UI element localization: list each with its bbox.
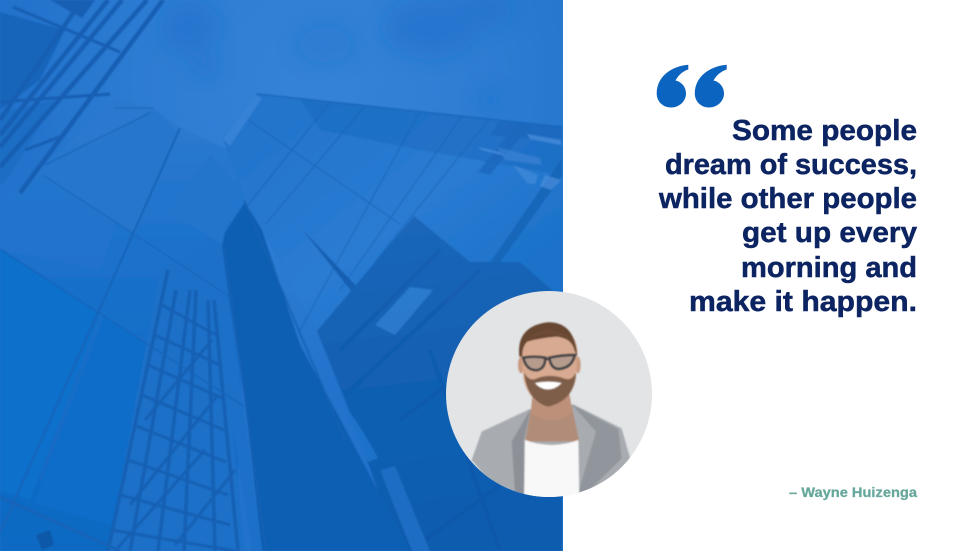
spike xyxy=(305,232,356,290)
quote text: make it happen. xyxy=(689,286,917,318)
ears xyxy=(518,357,524,373)
bottom left fixture xyxy=(36,530,54,550)
quote text: dream of success, xyxy=(665,149,917,181)
portrait photo xyxy=(446,291,652,502)
clouds xyxy=(162,0,510,112)
photo background circle xyxy=(446,291,652,497)
chest xyxy=(525,405,579,442)
smile xyxy=(535,382,562,389)
neck xyxy=(531,393,573,420)
quote text: while other people xyxy=(658,183,917,215)
light column xyxy=(345,405,378,462)
upper edge of building xyxy=(256,94,562,127)
lattice tower xyxy=(110,344,244,551)
icon: opening quotation mark xyxy=(657,65,727,108)
glass building, upper right xyxy=(223,95,562,335)
quote text: get up every xyxy=(742,217,917,249)
quote text xyxy=(658,115,917,318)
head xyxy=(522,336,578,397)
beard xyxy=(524,372,576,407)
hair xyxy=(519,322,577,357)
quote text: Some people xyxy=(732,115,917,147)
attribution: – Wayne Huizenga xyxy=(789,485,918,500)
tower tip xyxy=(212,158,226,244)
quote text: morning and xyxy=(741,252,917,284)
glass wall, left xyxy=(0,144,247,551)
long structural lines on glass wall xyxy=(0,108,245,551)
jacket xyxy=(472,404,631,502)
lattice framing, top left xyxy=(0,12,65,110)
dark central tower xyxy=(220,202,410,551)
light window reflections xyxy=(478,134,561,190)
panel: blue skyscraper photo background xyxy=(0,0,563,551)
white shirt xyxy=(524,440,579,502)
dark building, lower right xyxy=(317,216,562,551)
glasses xyxy=(523,355,575,370)
